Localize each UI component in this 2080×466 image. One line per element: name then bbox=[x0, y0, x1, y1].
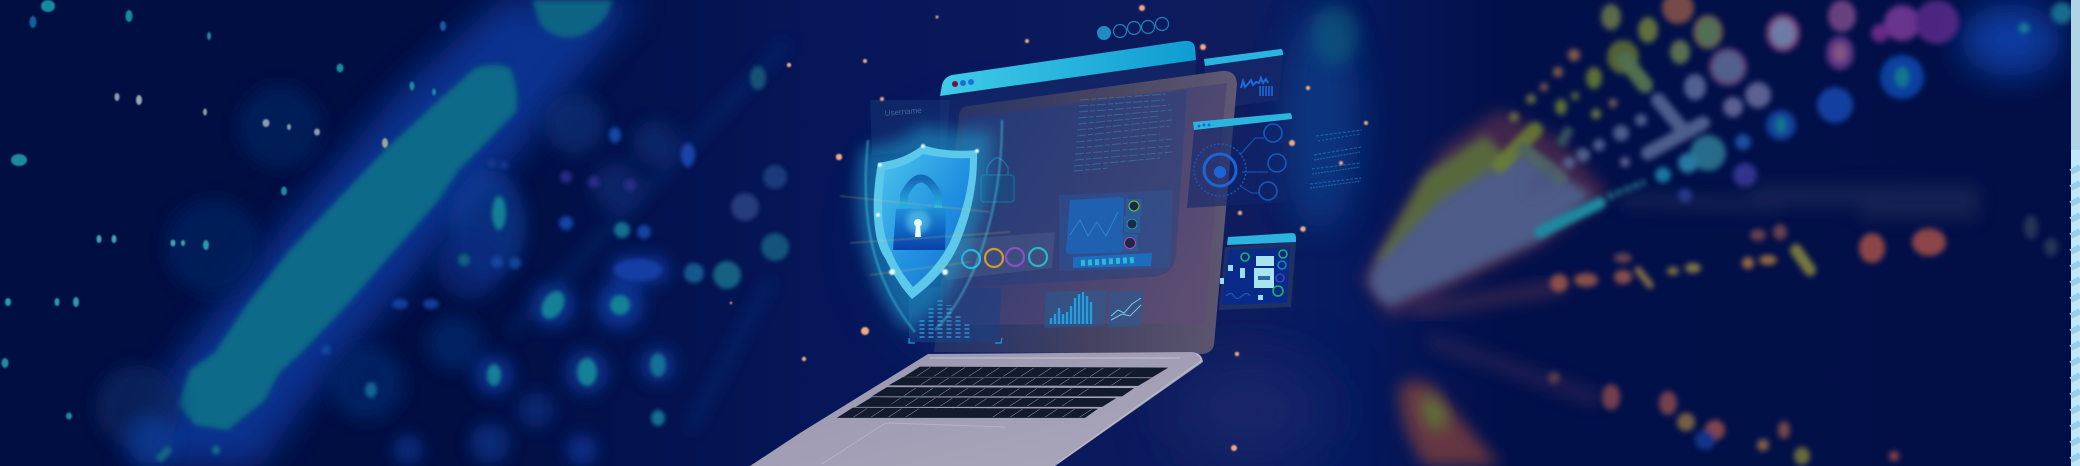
faint streaks: right bbox=[1399, 165, 1980, 466]
shield outer glow bbox=[858, 125, 992, 330]
shield bbox=[840, 120, 1010, 332]
icon row: pie and rings bbox=[1097, 18, 1168, 40]
side panel: signal chart bbox=[1204, 49, 1283, 106]
shield sparkle bbox=[876, 144, 979, 275]
faint login form: Username bbox=[884, 106, 922, 118]
dashboard panel bbox=[1059, 190, 1173, 271]
window control dots bbox=[952, 79, 974, 87]
line chart card bbox=[1066, 197, 1124, 254]
background glow: centre and right bbox=[880, 4, 2061, 460]
side panel: flow diagram bbox=[1219, 233, 1296, 310]
window title bar bbox=[940, 41, 1196, 96]
comet light burst: right bbox=[1362, 110, 1610, 318]
status icons bbox=[1122, 199, 1142, 251]
padlock body bbox=[893, 208, 946, 250]
ring status row bbox=[945, 232, 1055, 280]
bokeh dots: right bbox=[1500, 0, 2073, 465]
side panel: network nodes bbox=[1187, 113, 1292, 208]
bokeh dots: left large bbox=[96, 43, 786, 465]
trackpad outline bbox=[822, 423, 1005, 464]
shield frame bbox=[874, 145, 977, 299]
line chart: bottom right bbox=[1108, 290, 1143, 328]
side text labels bbox=[1310, 130, 1362, 188]
shield face bbox=[882, 154, 970, 287]
screen inner panel bbox=[950, 90, 1187, 288]
faint login form bbox=[870, 100, 950, 155]
screen text lines bbox=[1074, 94, 1172, 171]
padlock shackle bbox=[904, 178, 938, 208]
bokeh dots: left small bbox=[2, 0, 446, 420]
bokeh dots: left medium bbox=[158, 66, 789, 460]
laptop lid bezel bbox=[934, 71, 1237, 354]
energy arcs bbox=[866, 120, 1002, 332]
right edge strip bbox=[2071, 0, 2080, 466]
bead bar bbox=[1073, 253, 1152, 268]
screen lock outline bbox=[981, 158, 1014, 202]
browser window: large behind laptop bbox=[940, 41, 1196, 320]
laptop bbox=[750, 71, 1237, 466]
laptop base bbox=[750, 352, 1203, 466]
light rays bbox=[840, 196, 1010, 275]
base highlight bbox=[930, 354, 1201, 463]
keyboard bbox=[838, 367, 1167, 418]
keyhole glow bbox=[906, 210, 930, 237]
light streak: left bbox=[130, 0, 640, 466]
equalizer chart bbox=[909, 287, 1002, 343]
orange sparks bbox=[730, 5, 1368, 451]
red flare: bottom right bbox=[1417, 392, 1451, 434]
bar chart: bottom right bbox=[1044, 290, 1107, 328]
laptop screen bbox=[943, 83, 1227, 325]
